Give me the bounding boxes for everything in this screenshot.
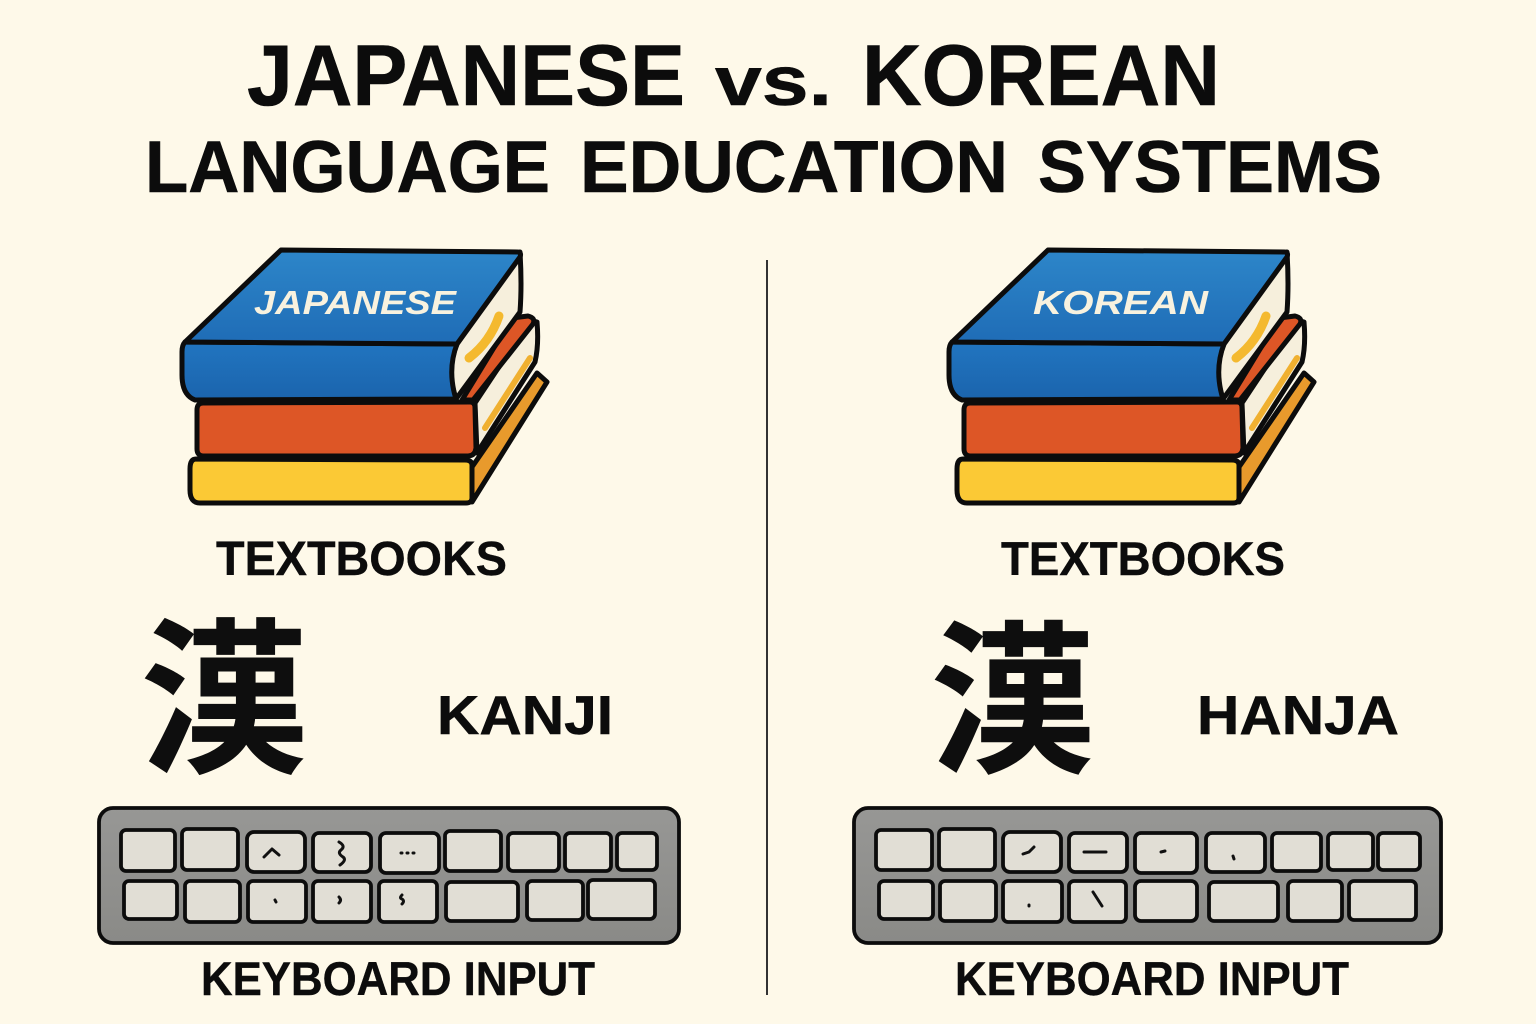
icon: korean keyboard xyxy=(854,808,1441,943)
panel: korean xyxy=(854,250,1441,1005)
label: textbooks: TEXTBOOKS xyxy=(1001,532,1285,585)
icon: japanese textbook stack xyxy=(182,250,547,503)
kanji character: 漢 xyxy=(140,608,308,796)
title: KOREAN xyxy=(862,28,1220,124)
label: keyboard input: KEYBOARD INPUT xyxy=(955,952,1349,1005)
center divider xyxy=(766,260,768,995)
label: kanji: KANJI xyxy=(437,684,613,746)
label: keyboard input: KEYBOARD INPUT xyxy=(201,952,595,1005)
book title: japanese: JAPANESE xyxy=(254,284,457,321)
title: SYSTEMS xyxy=(1038,127,1382,208)
title xyxy=(145,28,1382,208)
hanja character: 漢 xyxy=(930,611,1095,795)
icon: korean textbook stack xyxy=(949,250,1314,503)
title: JAPANESE xyxy=(247,28,685,124)
book title: korean: KOREAN xyxy=(1033,284,1209,321)
title: vs. xyxy=(715,42,832,120)
label: textbooks: TEXTBOOKS xyxy=(216,533,507,586)
panel: japanese xyxy=(99,250,679,1005)
label: hanja: HANJA xyxy=(1197,684,1399,746)
title: LANGUAGE xyxy=(145,127,550,208)
icon: japanese keyboard xyxy=(99,808,679,943)
title: EDUCATION xyxy=(580,127,1008,208)
